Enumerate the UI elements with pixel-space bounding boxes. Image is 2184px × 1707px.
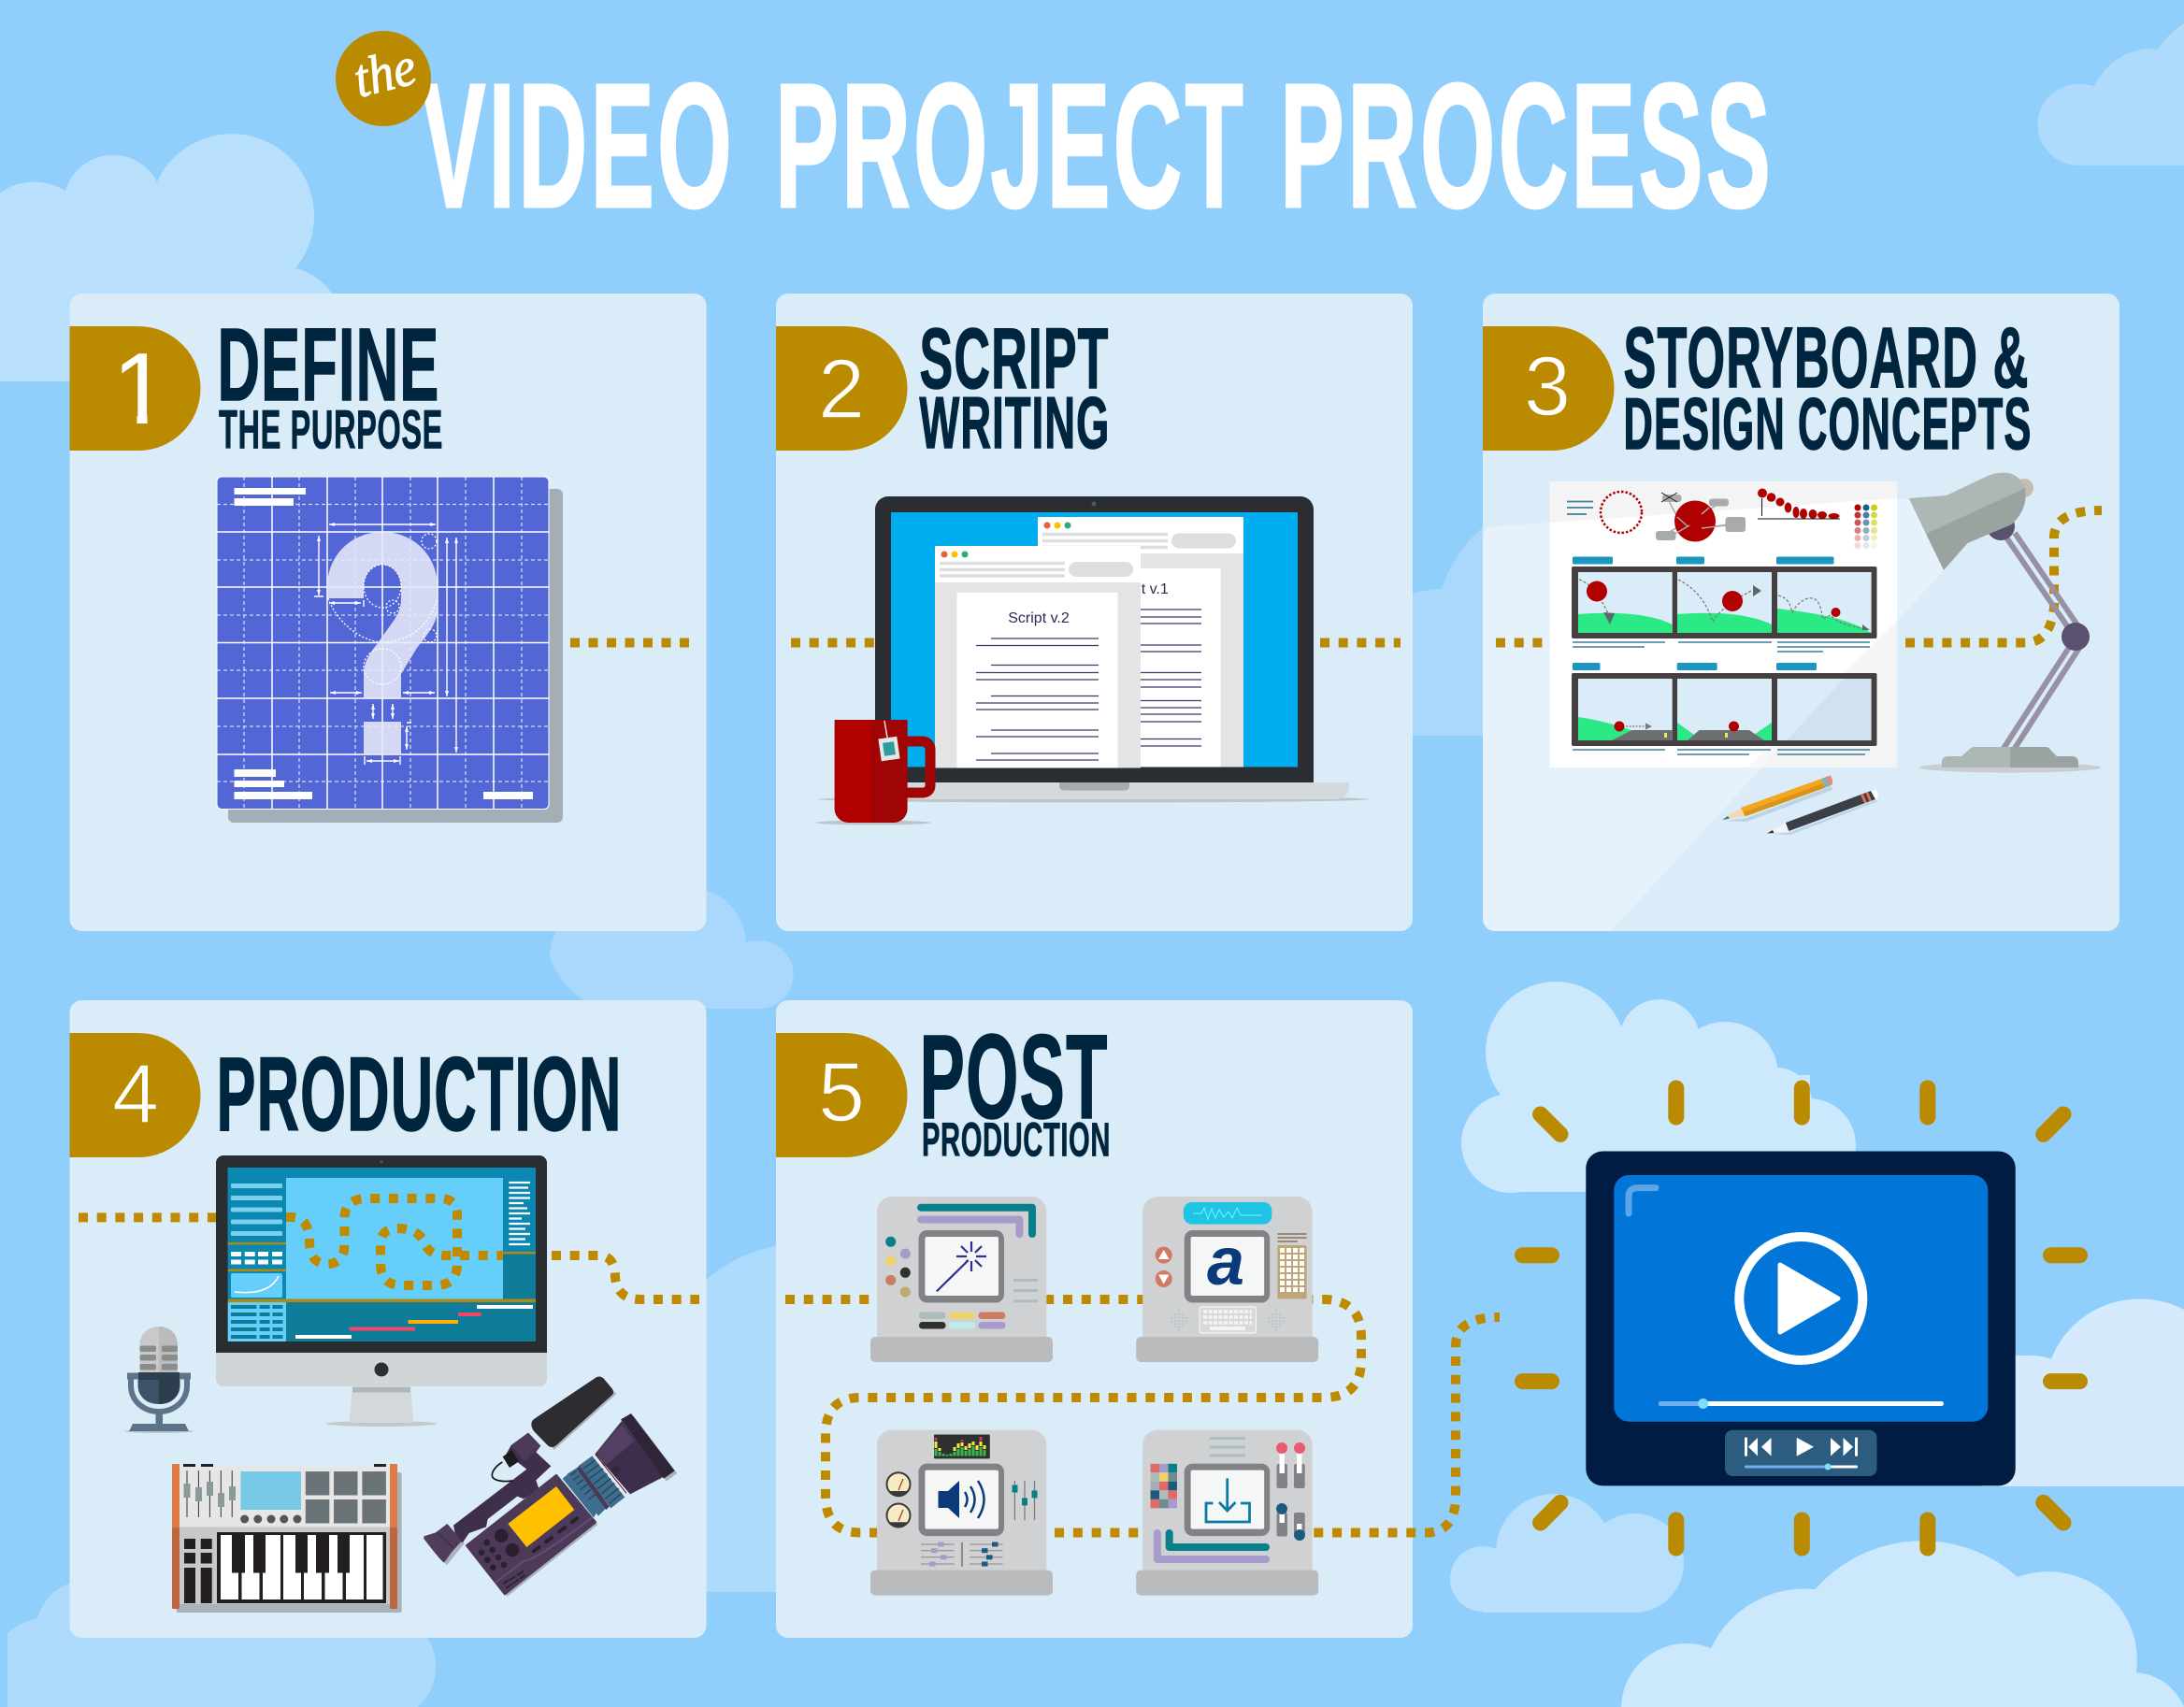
heading: script writing: WRITING	[920, 381, 1111, 464]
number badge 4: 4	[112, 1048, 159, 1141]
number badge 5: 5	[818, 1046, 865, 1140]
progress bar	[1659, 1399, 1944, 1409]
heading: post production: PRODUCTION	[922, 1112, 1111, 1167]
dotted path on screen	[286, 1198, 503, 1285]
heading: production: PRODUCTION	[217, 1036, 623, 1153]
light rays	[1522, 1088, 2079, 1548]
letter a: a	[1207, 1225, 1244, 1299]
panel 2: script writing	[776, 294, 1413, 931]
play button	[1739, 1237, 1862, 1360]
light cone	[1483, 498, 1944, 931]
heading: define the purpose: THE PURPOSE	[219, 400, 443, 460]
console: effects	[870, 1197, 1053, 1362]
video camera	[424, 1377, 677, 1597]
color palette	[1150, 1464, 1177, 1508]
title text: PROCESS	[1280, 48, 1774, 245]
heading: storyboard and design concepts	[1623, 310, 2033, 465]
heading: define the purpose	[217, 308, 443, 460]
panel 4: production	[69, 1000, 707, 1638]
dotted connector path	[785, 1299, 1500, 1533]
title text: VIDEO	[422, 48, 735, 245]
number badge 3	[1483, 326, 1614, 451]
front window: script v.2	[935, 546, 1141, 768]
title text: PROJECT	[775, 48, 1246, 245]
number badge 3: 3	[1524, 340, 1571, 434]
front window: script v.2: Script v.2	[1008, 610, 1070, 626]
back window: script v.1: Script v.1	[1107, 581, 1169, 597]
badge: the: the	[347, 36, 422, 109]
dotted connector in	[79, 1212, 216, 1222]
number badge 1: 1	[112, 332, 169, 446]
design concept sketches	[1567, 488, 1877, 549]
icon: magic wand	[937, 1241, 986, 1291]
console: audio	[870, 1430, 1053, 1596]
desktop monitor	[216, 1155, 547, 1427]
icon: download	[1206, 1478, 1249, 1522]
question mark	[327, 532, 438, 754]
dotted connectors	[791, 638, 1401, 647]
switches	[1276, 1442, 1305, 1541]
desk lamp	[1909, 473, 2101, 772]
number badge 2	[776, 326, 908, 451]
paper sheet	[1550, 481, 1897, 767]
number badge 1	[69, 326, 200, 451]
pencils	[1722, 776, 1878, 835]
dotted connector	[570, 638, 693, 647]
icon: speaker	[939, 1481, 959, 1518]
badge: the	[336, 31, 431, 126]
level meter	[934, 1434, 990, 1458]
blueprint with question mark	[217, 477, 563, 823]
microphone	[124, 1327, 194, 1433]
heading: define the purpose: DEFINE	[217, 308, 439, 423]
number badge 2: 2	[818, 343, 865, 437]
back window: script v.1	[1038, 517, 1243, 767]
panel 3: storyboard and design concepts	[1483, 294, 2119, 931]
title text	[422, 48, 1774, 245]
video player	[1586, 1152, 2016, 1485]
heading: script writing: SCRIPT	[920, 311, 1109, 407]
title	[336, 31, 1774, 245]
white paper in the light	[1550, 481, 1897, 767]
laptop	[818, 496, 1370, 802]
dotted connectors	[1496, 638, 1543, 647]
heading: post production: POST	[920, 1011, 1109, 1144]
number badge 5	[776, 1033, 908, 1157]
storyboard row 2	[1572, 663, 1877, 754]
console: export	[1136, 1430, 1318, 1596]
dotted connector out	[552, 1255, 699, 1299]
heading: post production	[920, 1011, 1111, 1167]
panel 1: define the purpose	[69, 294, 707, 931]
heading: script writing	[920, 311, 1111, 464]
transport controls	[1725, 1430, 1877, 1476]
storyboard sheet	[1567, 488, 1877, 754]
mug	[816, 720, 930, 825]
number badge 4	[69, 1033, 200, 1157]
console: text and titles	[1136, 1197, 1318, 1362]
midi keyboard	[172, 1464, 402, 1613]
panel 5: post production	[776, 1000, 1500, 1638]
storyboard row 1	[1572, 557, 1877, 652]
monitor screen	[228, 1168, 536, 1341]
